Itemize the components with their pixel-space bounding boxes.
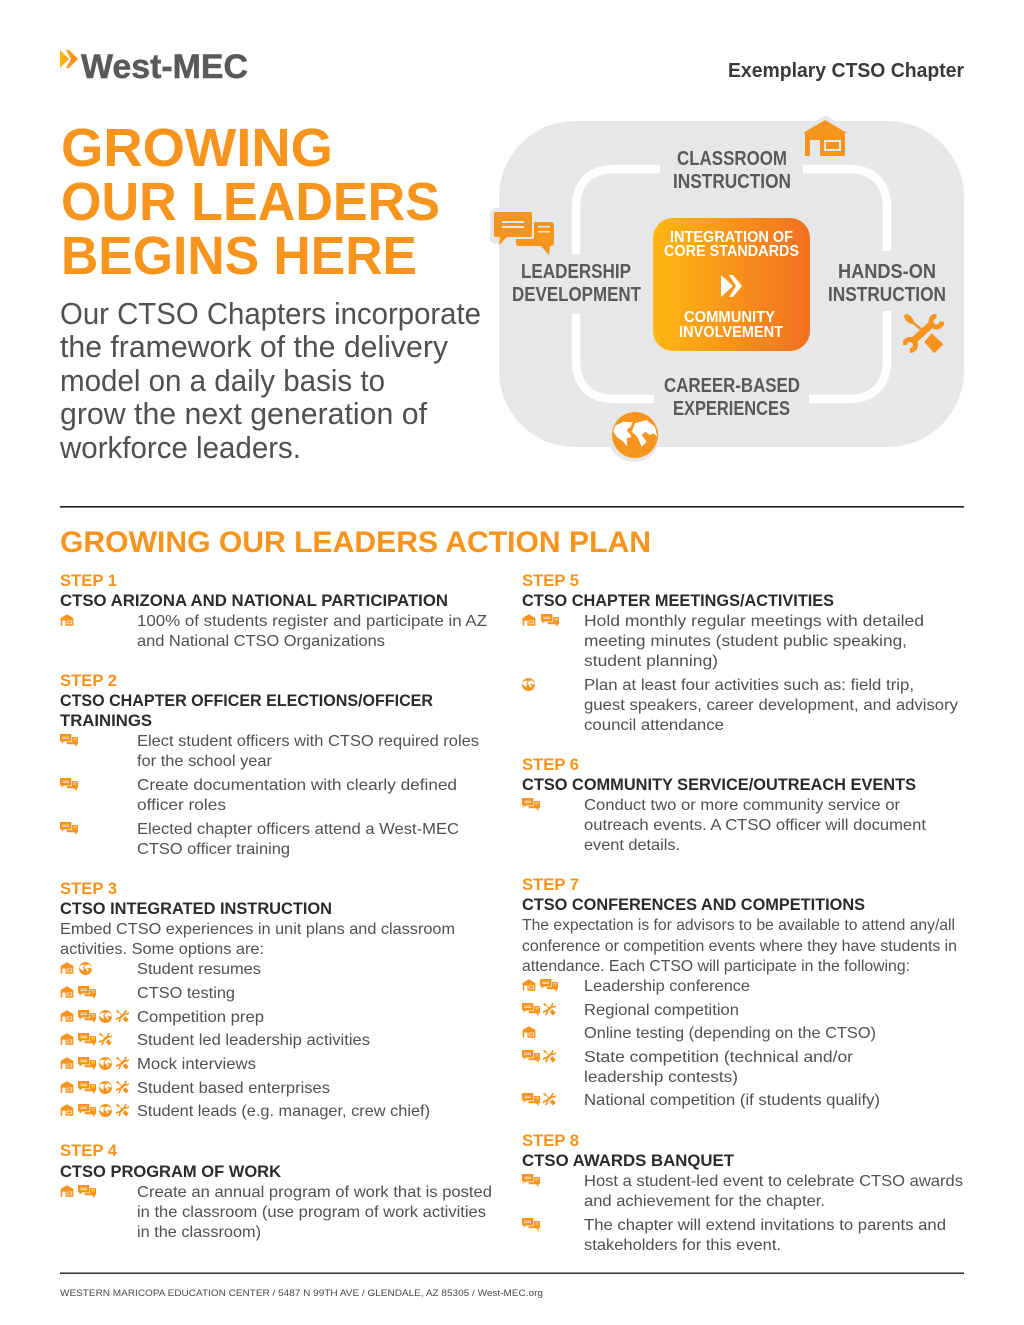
section heading: action plan: GROWING OUR LEADERS ACTION PLAN [60, 526, 651, 559]
intro paragraph: Our CTSO Chapters incorporate [60, 296, 481, 331]
label: classroom instruction: CLASSROOM [677, 148, 787, 170]
step 7: leadership contests) [584, 1069, 738, 1086]
step 5: meeting minutes (student public speaking, [584, 633, 907, 650]
step 6 [522, 756, 927, 854]
step 7: The expectation is for advisors to be available to attend any/all [522, 917, 955, 934]
intro paragraph: workforce leaders. [59, 430, 301, 465]
step 3: CTSO INTEGRATED INSTRUCTION [60, 900, 332, 918]
title: GROWING [61, 118, 333, 178]
step 4: in the classroom (use program of work activities [137, 1204, 486, 1221]
title: BEGINS HERE [61, 226, 417, 286]
logo: West-MEC [60, 48, 248, 86]
icon: logo chevrons [60, 50, 78, 68]
divider [60, 506, 964, 508]
step 4: STEP 4 [60, 1142, 118, 1160]
label: career-based experiences: EXPERIENCES [673, 398, 790, 420]
step 5: guest speakers, career development, and advisory [584, 697, 958, 714]
label: hands-on instruction [828, 261, 946, 306]
label: career-based experiences: CAREER-BASED [664, 375, 800, 397]
step 6: STEP 6 [522, 756, 579, 774]
intro paragraph: the framework of the delivery [60, 329, 448, 364]
step 1: CTSO ARIZONA AND NATIONAL PARTICIPATION [60, 592, 448, 610]
step 6: CTSO COMMUNITY SERVICE/OUTREACH EVENTS [522, 776, 916, 794]
divider [60, 1272, 964, 1274]
center box: integration and community [653, 218, 810, 351]
label: classroom instruction [673, 148, 791, 193]
label: leadership development: LEADERSHIP [521, 261, 631, 283]
step 2: Elected chapter officers attend a West-MEC [137, 821, 459, 838]
step 5: student planning) [584, 653, 718, 670]
step 7: STEP 7 [522, 876, 579, 894]
step 3: STEP 3 [60, 880, 117, 898]
step 4 [60, 1142, 492, 1241]
step 5: CTSO CHAPTER MEETINGS/ACTIVITIES [522, 592, 834, 610]
diagram background panel [499, 121, 964, 447]
step 3 [60, 880, 455, 1120]
step 7: Regional competition [584, 1002, 739, 1019]
step 4: Create an annual program of work that is posted [137, 1184, 492, 1201]
step 6: outreach events. A CTSO officer will document [584, 817, 927, 834]
step 3: Student resumes [137, 961, 261, 978]
step 3: Mock interviews [137, 1056, 256, 1073]
icon: speech bubbles [490, 208, 554, 255]
center box: integration and community: CORE STANDARDS [664, 243, 799, 260]
intro paragraph: model on a daily basis to [60, 363, 385, 398]
label: hands-on instruction: INSTRUCTION [828, 284, 946, 306]
step 2 [60, 672, 479, 858]
step 3: Competition prep [137, 1009, 264, 1026]
label: classroom instruction: INSTRUCTION [673, 171, 791, 193]
center box: integration and community: COMMUNITY [684, 309, 775, 326]
step 3: Student leads (e.g. manager, crew chief) [137, 1103, 430, 1120]
icon: classroom house [800, 115, 851, 158]
step 7: Leadership conference [584, 978, 750, 995]
label: leadership development [512, 261, 641, 306]
step 8 [522, 1132, 963, 1254]
document label: Exemplary CTSO Chapter [728, 60, 964, 82]
step 8: and achievement for the chapter. [584, 1193, 825, 1210]
step 7: conference or competition events where they have students in [522, 938, 957, 955]
step 6: Conduct two or more community service or [584, 797, 901, 814]
step 8: CTSO AWARDS BANQUET [522, 1152, 734, 1170]
step 2: officer roles [137, 797, 226, 814]
icon: globe [608, 410, 660, 462]
step 2: for the school year [137, 753, 273, 770]
step 3: Student based enterprises [137, 1080, 330, 1097]
step 4: in the classroom) [137, 1224, 261, 1241]
step 7 [522, 876, 957, 1109]
label: career-based experiences [664, 375, 800, 420]
intro paragraph: grow the next generation of [60, 396, 427, 431]
step 5 [522, 572, 958, 734]
step 2: Elect student officers with CTSO required roles [137, 733, 479, 750]
step 3: Embed CTSO experiences in unit plans and classroom [60, 921, 455, 938]
icon: tools [902, 312, 943, 353]
white cycle path [576, 169, 887, 399]
step 8: Host a student-led event to celebrate CTSO awards [584, 1173, 963, 1190]
diagram: delivery model [490, 115, 964, 462]
step 5: STEP 5 [522, 572, 579, 590]
label: hands-on instruction: HANDS-ON [838, 261, 936, 283]
logo wordmark: West-MEC [81, 48, 248, 86]
footer: WESTERN MARICOPA EDUCATION CENTER / 5487 N 99TH AVE / GLENDALE, AZ 85305 / West-MEC.org [60, 1288, 543, 1299]
step 7: CTSO CONFERENCES AND COMPETITIONS [522, 896, 865, 914]
center box: integration and community: INVOLVEMENT [679, 324, 783, 341]
step 3: CTSO testing [137, 985, 235, 1002]
step 7: National competition (if students qualify) [584, 1092, 880, 1109]
step 8: The chapter will extend invitations to parents and [584, 1217, 946, 1234]
step 5: council attendance [584, 717, 724, 734]
step 5: Plan at least four activities such as: field trip, [584, 677, 914, 694]
step 2: Create documentation with clearly defined [137, 777, 457, 794]
step 7: Online testing (depending on the CTSO) [584, 1025, 876, 1042]
center box: integration and community: INTEGRATION OF [670, 229, 793, 246]
title: OUR LEADERS [61, 172, 440, 232]
step 7: State competition (technical and/or [584, 1049, 854, 1066]
step 2: STEP 2 [60, 672, 117, 690]
step 2: CTSO officer training [137, 841, 290, 858]
step 8: stakeholders for this event. [584, 1237, 781, 1254]
step 3: activities. Some options are: [60, 941, 264, 958]
step 1 [60, 572, 487, 650]
step 4: CTSO PROGRAM OF WORK [60, 1163, 281, 1181]
intro paragraph [59, 296, 481, 465]
step 1: STEP 1 [60, 572, 117, 590]
step 5: Hold monthly regular meetings with detailed [584, 613, 924, 630]
label: leadership development: DEVELOPMENT [512, 284, 641, 306]
step 6: event details. [584, 837, 680, 854]
step 2: TRAININGS [60, 712, 152, 730]
step 3: Student led leadership activities [137, 1032, 370, 1049]
title [61, 118, 440, 286]
step 1: 100% of students register and participate in AZ [137, 613, 487, 630]
step 2: CTSO CHAPTER OFFICER ELECTIONS/OFFICER [60, 692, 433, 710]
step 1: and National CTSO Organizations [137, 633, 385, 650]
step 8: STEP 8 [522, 1132, 579, 1150]
step 7: attendance. Each CTSO will participate in the following: [522, 958, 910, 975]
